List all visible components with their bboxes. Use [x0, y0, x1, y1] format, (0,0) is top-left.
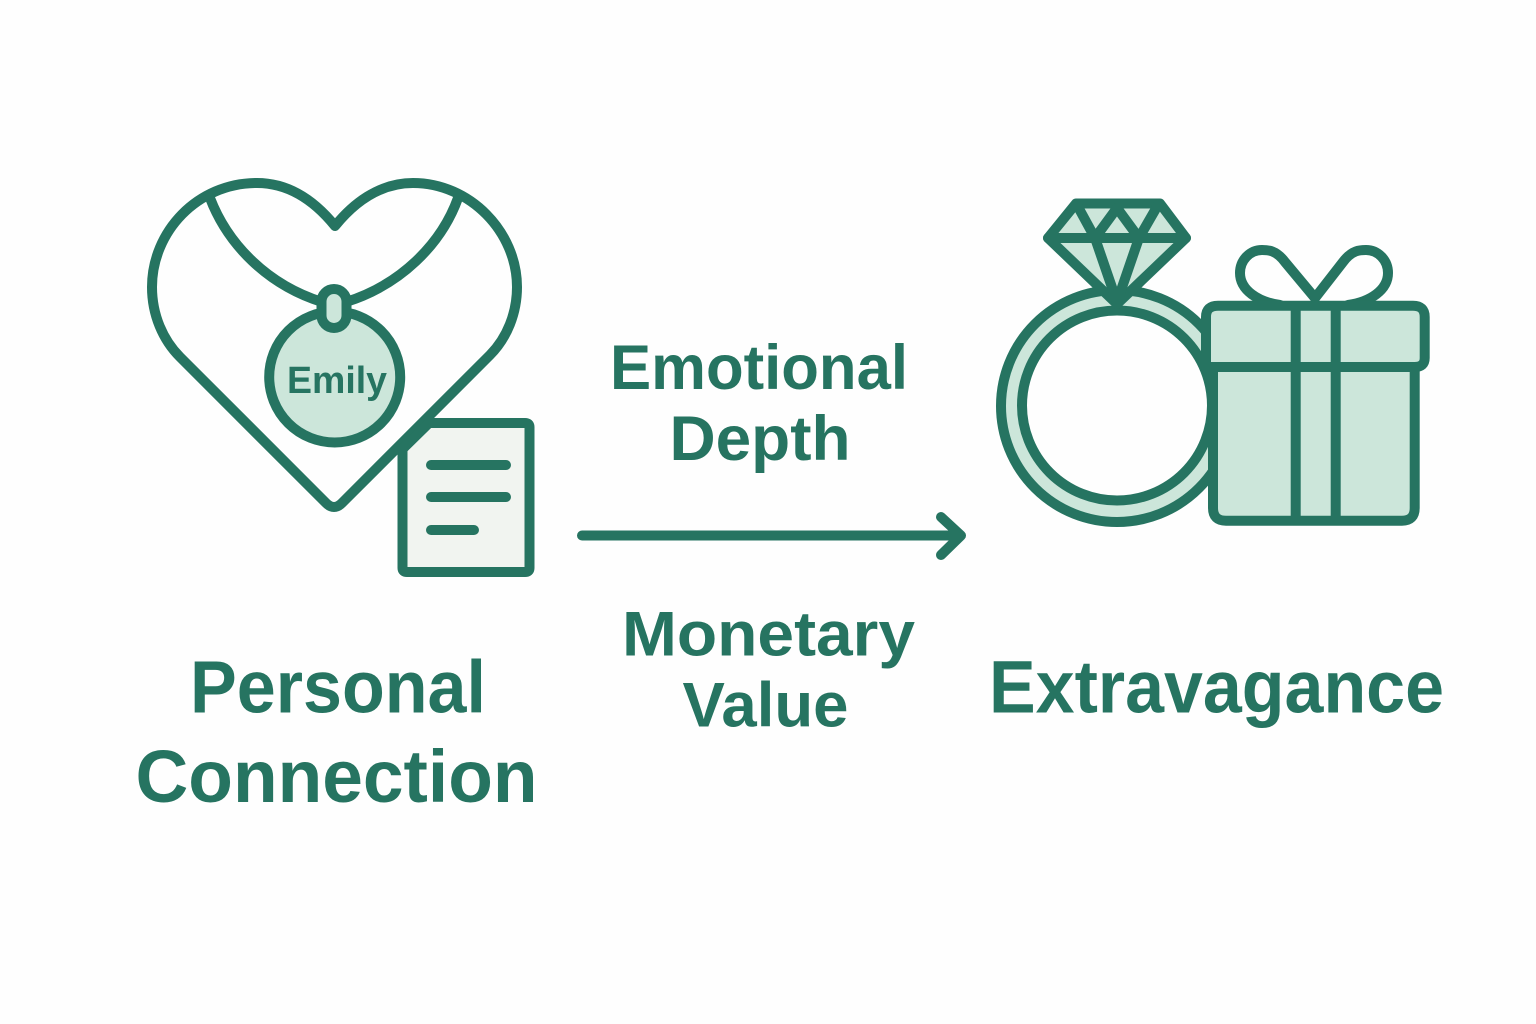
label: personal connection: Personal [190, 646, 486, 728]
icon: pendant [269, 289, 400, 442]
icon: diamond ring [1001, 204, 1233, 522]
icon: heart necklace with name pendant [152, 183, 517, 507]
label: monetary value [622, 600, 915, 740]
label: emotional depth: Emotional [610, 333, 908, 403]
pendant name: Emily [287, 360, 387, 402]
icon: note document [402, 423, 530, 572]
label: personal connection [136, 646, 538, 818]
arrow [582, 517, 961, 555]
icon: gift box [1206, 250, 1425, 521]
label: personal connection: Connection [136, 735, 538, 818]
label: extravagance: Extravagance [989, 646, 1444, 728]
label: monetary value: Monetary [622, 600, 915, 670]
label: emotional depth [610, 333, 908, 474]
label: emotional depth: Depth [670, 404, 850, 474]
label: monetary value: Value [682, 670, 848, 740]
